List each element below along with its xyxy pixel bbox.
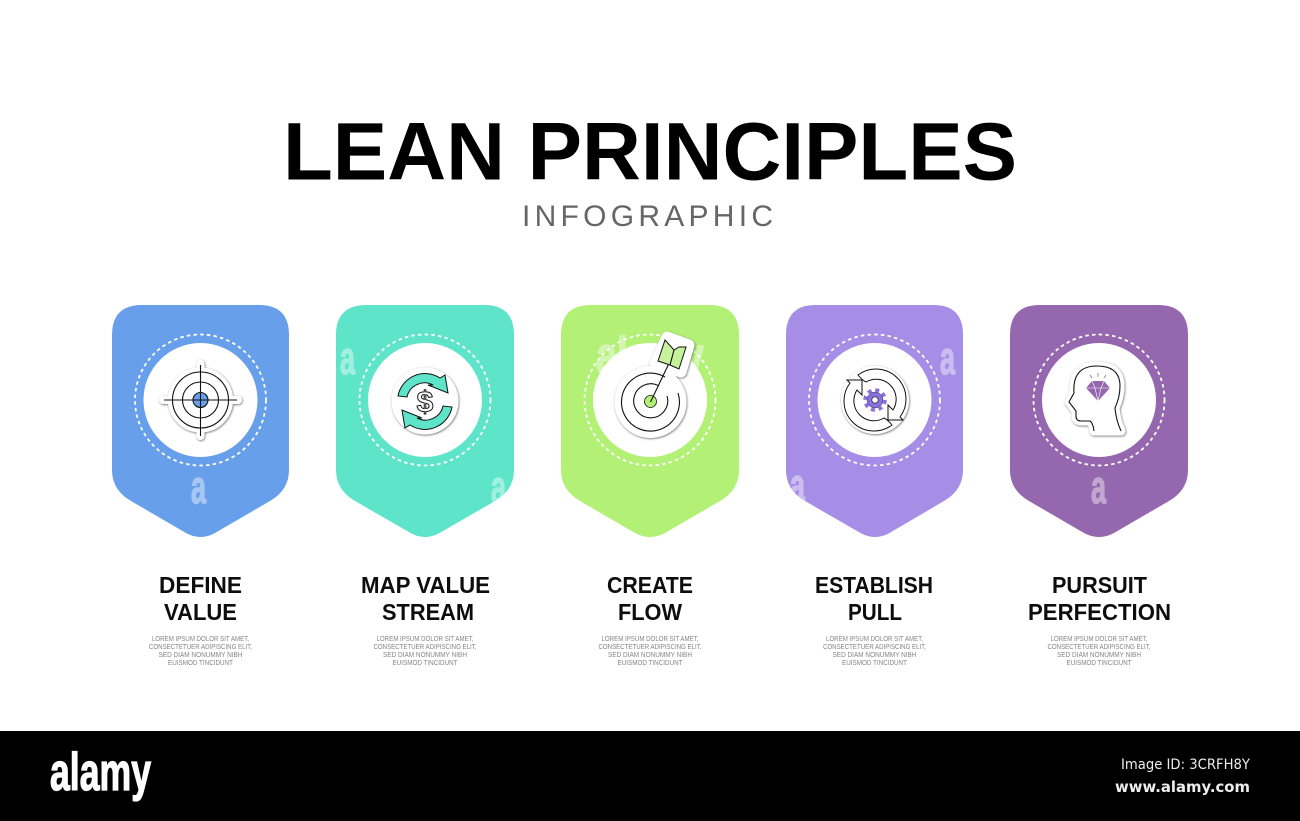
watermark: a [191,461,206,513]
text: define value description: CONSECTETUER ADIPISCING ELIT, [149,644,252,651]
white disc [144,343,258,457]
shield: define value [112,305,289,537]
text: map value stream description: LOREM IPSUM DOLOR SIT AMET, [376,636,474,643]
dollar sign: $ [417,386,434,419]
label: define value: DEFINE [159,572,242,598]
text: create flow description: EUISMOD TINCIDUNT [618,660,683,667]
text: map value stream description [374,636,477,667]
label: pursuit perfection: PERFECTION [1028,599,1171,625]
white disc [368,343,482,457]
alamy logo: alamy [50,743,151,802]
image id: Image ID: 3CRFH8Y [1121,757,1250,773]
watermarks: a [790,459,805,511]
text: pursuit perfection description [1048,636,1151,667]
text: establish pull description [823,636,926,667]
text: define value description: EUISMOD TINCIDUNT [168,660,234,667]
gear [865,390,885,410]
panel: establish pull [786,305,963,537]
dashed ring [135,334,266,466]
label: create flow: FLOW [618,599,682,625]
text: establish pull description: CONSECTETUER ADIPISCING ELIT, [823,644,926,651]
panel: map value stream [336,305,514,537]
text: map value stream description: EUISMOD TINCIDUNT [392,660,458,667]
dashed ring [360,334,490,466]
watermarks [340,348,505,502]
footer bar [0,731,1300,821]
label: pursuit perfection: PURSUIT [1052,572,1147,598]
text: create flow description: LOREM IPSUM DOLOR SIT AMET, [602,636,699,643]
icon: crosshair target [163,364,238,436]
text: establish pull description: EUISMOD TINCIDUNT [842,660,908,667]
icon: dollar cycle arrows [392,368,458,434]
watermarks: a [940,332,955,384]
icon: gear cycle arrows [841,366,909,434]
text: establish pull description: SED DIAM NONUMMY NIBH [832,652,916,659]
title: LEAN PRINCIPLES [283,106,1017,198]
label: map value stream [361,572,490,625]
text: define value description: LOREM IPSUM DOLOR SIT AMET, [152,636,249,643]
watermarks [791,348,956,501]
panel: pursuit perfection [1010,305,1188,537]
icon: head with diamond [1069,366,1121,431]
diamond [1086,381,1110,401]
label: pursuit perfection [1028,572,1171,625]
dashed ring [1034,334,1164,466]
website: www.alamy.com [1115,778,1250,796]
watermark: a [1091,461,1106,513]
panel: define value [112,305,289,537]
label: map value stream: STREAM [382,599,474,625]
watermarks: a [491,461,506,513]
panel: create flow [561,305,739,537]
dart fletching [658,340,686,369]
shield: map value stream [336,305,514,537]
white disc [593,343,707,457]
shield: create flow [561,305,739,537]
shield: establish pull [786,305,963,537]
watermarks: a [340,332,355,384]
text: define value description: SED DIAM NONUMMY NIBH [158,652,242,659]
text: define value description [149,636,252,667]
label: create flow [607,572,693,625]
text: map value stream description: SED DIAM NONUMMY NIBH [383,652,467,659]
text: pursuit perfection description: SED DIAM NONUMMY NIBH [1057,652,1141,659]
text: establish pull description: LOREM IPSUM DOLOR SIT AMET, [826,636,923,643]
text: create flow description: SED DIAM NONUMMY NIBH [608,652,692,659]
subtitle: INFOGRAPHIC [522,200,773,233]
text: pursuit perfection description: CONSECTETUER ADIPISCING ELIT, [1048,644,1151,651]
label: establish pull: ESTABLISH [815,572,933,598]
dashed ring [809,334,940,466]
icon: dart in target [614,337,689,438]
watermark: alamy [596,327,704,385]
white disc [818,343,932,457]
label: establish pull: PULL [848,599,902,625]
label: create flow: CREATE [607,572,693,598]
text: create flow description: CONSECTETUER ADIPISCING ELIT, [598,644,702,651]
text: pursuit perfection description: EUISMOD TINCIDUNT [1066,660,1132,667]
label: define value [159,572,242,625]
shield: pursuit perfection [1010,305,1188,537]
text: create flow description [598,636,702,667]
label: establish pull [815,572,933,625]
label: map value stream: MAP VALUE [361,572,490,598]
text: pursuit perfection description: LOREM IPSUM DOLOR SIT AMET, [1050,636,1148,643]
dashed ring [584,334,716,466]
text: map value stream description: CONSECTETUER ADIPISCING ELIT, [374,644,477,651]
white disc [1042,343,1156,457]
label: define value: VALUE [164,599,237,625]
